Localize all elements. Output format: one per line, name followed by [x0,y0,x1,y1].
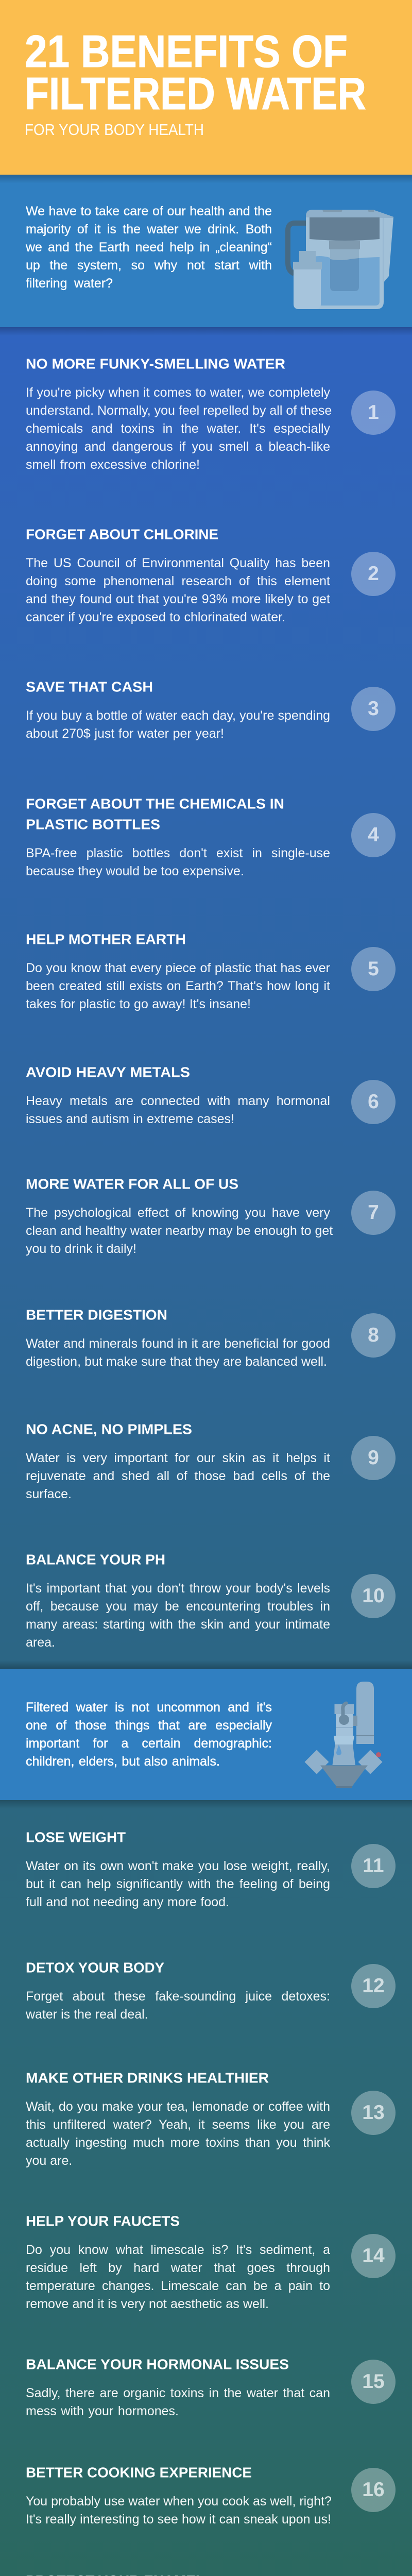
text block [26,1093,330,1126]
text block: mess with your hormones. [26,2404,179,2418]
text block: cancer if you're exposed to chlorinated water. [26,610,285,624]
text block: been created still exists on Earth? That's how long it [26,979,330,993]
text block: understand. Normally, you feel repelled by all of these [26,403,332,417]
number badge: 6 [368,1091,379,1113]
text block [26,1581,330,1650]
intro text: we and the Earth need help in „cleaning“ [26,240,272,255]
number badge [351,1844,396,1888]
benefit 15 [0,2353,412,2420]
benefit 1 [26,355,396,472]
text block [26,846,330,878]
text block [26,385,332,472]
text block: It's really interesting to see how it can sneak upon us! [26,2512,331,2527]
benefit 6 [26,1064,396,1126]
benefit 10 [26,1551,396,1650]
text block [26,1859,330,1909]
text block: Do you know that every piece of plastic that has ever [26,960,330,975]
number badge [351,1574,396,1618]
text block: The US Council of Environmental Quality has been [26,555,330,570]
text block: issues and autism in extreme cases! [26,1112,234,1126]
text block [26,2098,335,2170]
text block [26,1336,330,1368]
callout text [26,1700,272,1768]
title: 21 BENEFITS OF [25,26,348,77]
text block: Forget about these fake-sounding juice detoxes: [26,1989,330,2004]
title: FOR YOUR BODY HEALTH [25,121,204,139]
number badge: 12 [362,1975,385,1997]
benefit 8 [26,1307,396,1368]
icon: water filter jug [285,210,393,309]
text block: remove and it is very not aesthetic as well. [26,2297,269,2311]
text block: this unfiltered water? Yeah, it seems like you are [26,2117,330,2132]
heading: BALANCE YOUR HORMONAL ISSUES [26,2356,288,2372]
title: FILTERED WATER [25,68,366,119]
text block: If you buy a bottle of water each day, you're spending [26,708,330,722]
callout text: one of those things that are especially [26,1718,272,1732]
number badge: 11 [363,1855,384,1877]
text block: area. [26,1635,55,1650]
number badge: 9 [368,1447,379,1469]
panel: demographic callout [0,1669,412,1800]
text block: BPA-free plastic bottles don't exist in single-use [26,846,330,860]
heading: SAVE THAT CASH [26,679,152,694]
intro text: filtering water? [26,276,113,291]
benefit 13 [0,2067,412,2170]
number badge: 4 [368,824,379,846]
benefit 9 [26,1421,396,1501]
text block [26,2493,335,2529]
text block: about 270$ just for water per year! [26,726,224,741]
number badge [351,1313,396,1358]
number badge [351,2091,396,2135]
number badge [351,687,396,731]
intro text [26,204,272,291]
text block: The psychological effect of knowing you have very [26,1206,330,1220]
heading [26,795,284,832]
number badge: 2 [368,563,379,585]
text block: You probably use water when you cook as well, right? [26,2494,332,2508]
benefit 2 [26,526,396,624]
text block: and they found out that you're 93% more likely to get [26,591,330,606]
text block: rejuvenate and shed all of those bad cells of the [26,1468,330,1483]
text block: water is the real deal. [26,2007,148,2022]
text block: Wait, do you make your tea, lemonade or coffee with [26,2099,330,2113]
number badge [351,1436,396,1480]
callout text: important for a certain demographic: [26,1736,272,1751]
number badge [351,2468,396,2512]
benefit 7 [26,1176,396,1256]
text block: many areas: starting with the skin and your intimate [26,1617,330,1631]
number badge: 16 [362,2479,385,2501]
number badge: 13 [362,2101,385,2124]
text block: but it can help significantly with the feeling of being [26,1877,330,1891]
heading: BETTER DIGESTION [26,1307,167,1323]
number badge [351,947,396,991]
benefit 5 [26,931,396,1011]
text block: Sadly, there are organic toxins in the water that can [26,2385,330,2400]
heading: AVOID HEAVY METALS [26,1064,190,1080]
number badge: 10 [362,1585,385,1607]
heading: HELP YOUR FAUCETS [26,2213,179,2229]
number badge: 3 [368,698,379,720]
number badge: 1 [368,401,379,423]
benefit 11 [26,1829,396,1909]
panel: intro [0,175,412,327]
text block: you to drink it daily! [26,1242,136,1256]
text block: off, because you may be encountering troubles in [26,1599,330,1614]
number badge [351,1080,396,1124]
text block: you are. [26,2154,72,2168]
heading: FORGET ABOUT THE CHEMICALS IN [26,795,284,811]
text block: clean and healthy water nearby may be enough to get [26,1223,333,1238]
panel: header [0,0,412,175]
heading: FORGET ABOUT CHLORINE [26,526,218,542]
text block: Heavy metals are connected with many hormonal [26,1093,330,1108]
text block: Water is very important for our skin as it helps it [26,1451,330,1465]
number badge [351,2234,396,2278]
heading: MAKE OTHER DRINKS HEALTHIER [26,2070,269,2086]
text block: Do you know what limescale is? It's sediment, a [26,2242,330,2257]
text block: Water on its own won't make you lose weight, really, [26,1859,330,1873]
heading: NO MORE FUNKY-SMELLING WATER [26,355,285,371]
benefit 14 [0,2210,412,2313]
number badge [351,1964,396,2008]
text block: annoying and dangerous if you smell a bleach-like [26,439,330,453]
text block [26,1988,335,2024]
benefit 16 [0,2462,412,2529]
number badge: 8 [368,1324,379,1346]
number badge: 14 [362,2245,385,2267]
callout text: Filtered water is not uncommon and it's [26,1700,272,1715]
benefit 3 [26,679,396,741]
text block: temperature changes. Limescale can be a pain to [26,2278,330,2293]
number badge [351,1191,396,1235]
text block: If you're picky when it comes to water, we completely [26,385,330,400]
heading: MORE WATER FOR ALL OF US [26,1176,238,1192]
text block [26,708,330,741]
title [25,26,366,139]
callout text: children, elders, but also animals. [26,1754,220,1768]
number badge [351,813,396,857]
text block [26,1451,330,1501]
text block: because they would be too expensive. [26,863,244,878]
text block: Water and minerals found in it are beneficial for good [26,1336,330,1351]
text block: chemicals and toxins in the water. It's especially [26,421,330,436]
heading: DETOX YOUR BODY [26,1960,164,1975]
text block [26,960,330,1011]
text block [26,555,330,624]
heading: LOSE WEIGHT [26,1829,126,1845]
heading: BALANCE YOUR PH [26,1551,165,1567]
text block: takes for plastic to go away! It's insane! [26,996,251,1011]
number badge: 7 [368,1201,379,1224]
heading: BETTER COOKING EXPERIENCE [26,2464,251,2480]
number badge: 15 [362,2370,385,2393]
text block: surface. [26,1487,72,1501]
text block: smell from excessive chlorine! [26,457,200,472]
number badge [351,2360,396,2404]
text block: actually ingesting much more toxins than you think [26,2135,330,2149]
text block: full and not needing any more food. [26,1895,229,1909]
text block: residue left by hard water that goes through [26,2261,330,2275]
heading: NO ACNE, NO PIMPLES [26,1421,192,1437]
text block: doing some phenomenal research of this element [26,574,330,588]
text block: digestion, but make sure that they are balanced well. [26,1354,327,1368]
number badge [351,391,396,435]
text block [26,2384,335,2420]
text block [26,1206,333,1256]
heading: PLASTIC BOTTLES [26,816,160,832]
text block [26,2241,335,2313]
number badge [351,552,396,596]
benefit 4 [26,795,396,878]
intro text: up the system, so why not start with [26,258,272,273]
heading: HELP MOTHER EARTH [26,931,185,947]
number badge: 5 [368,958,379,980]
benefit 12 [26,1960,396,2022]
intro text: We have to take care of our health and the [26,204,272,218]
icon: faucet with filter [305,1682,382,1788]
intro text: majority of it is the water we drink. Both [26,222,272,236]
text block: It's important that you don't throw your body's levels [26,1581,330,1595]
